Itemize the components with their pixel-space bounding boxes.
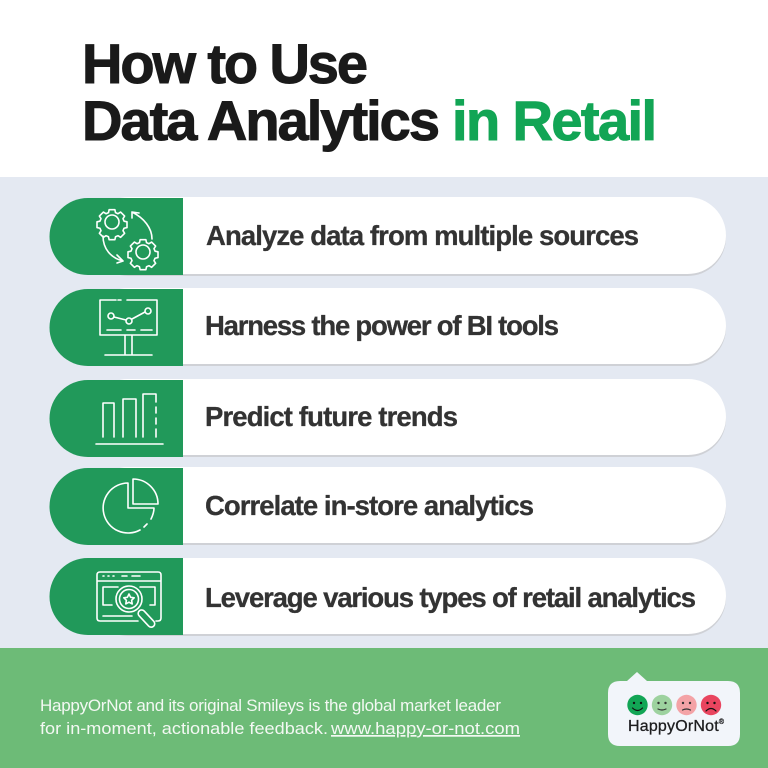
icon: gears with arrows bbox=[97, 210, 158, 270]
footer text: HappyOrNot and its original Smileys is the global market leader bbox=[40, 696, 501, 715]
footer text: for in-moment, actionable feedback. bbox=[40, 719, 328, 738]
row 5: leverage analytics bbox=[50, 558, 726, 636]
row 4: correlate analytics bbox=[50, 467, 726, 545]
icon: smiley happy bbox=[627, 695, 648, 715]
panel: steps background bbox=[0, 177, 768, 648]
text: correlate: Correlate in-store analytics bbox=[205, 490, 534, 521]
text: BI tools: Harness the power of BI tools bbox=[205, 310, 559, 341]
icon: browser window with magnifier bbox=[97, 572, 161, 629]
icon: smiley somewhat happy bbox=[652, 695, 672, 715]
footer text bbox=[40, 696, 520, 738]
title: Data Analytics bbox=[82, 89, 440, 152]
text: leverage: Leverage various types of retail analytics bbox=[205, 582, 696, 613]
icon: bar chart bbox=[96, 394, 163, 444]
logo: HappyOrNot speech bubble bbox=[608, 672, 740, 746]
panel: footer bbox=[0, 648, 768, 768]
row 3: predict trends bbox=[50, 379, 726, 457]
row 1: analyze data bbox=[50, 197, 726, 276]
icon: monitor with line chart bbox=[100, 300, 157, 355]
text: predict: Predict future trends bbox=[205, 401, 458, 432]
footer text: www.happy-or-not.com bbox=[330, 719, 520, 738]
logo wordmark: ® bbox=[719, 718, 725, 726]
icon: smiley somewhat unhappy bbox=[676, 695, 697, 715]
icon: smiley unhappy bbox=[701, 695, 721, 715]
title: How to Use bbox=[82, 32, 368, 95]
title bbox=[82, 32, 657, 152]
title: in Retail bbox=[452, 89, 657, 152]
icon: pie chart bbox=[103, 479, 158, 533]
logo wordmark: HappyOrNot bbox=[628, 718, 719, 735]
text: analyze: Analyze data from multiple sources bbox=[206, 220, 639, 251]
row 2: BI tools bbox=[50, 288, 726, 366]
